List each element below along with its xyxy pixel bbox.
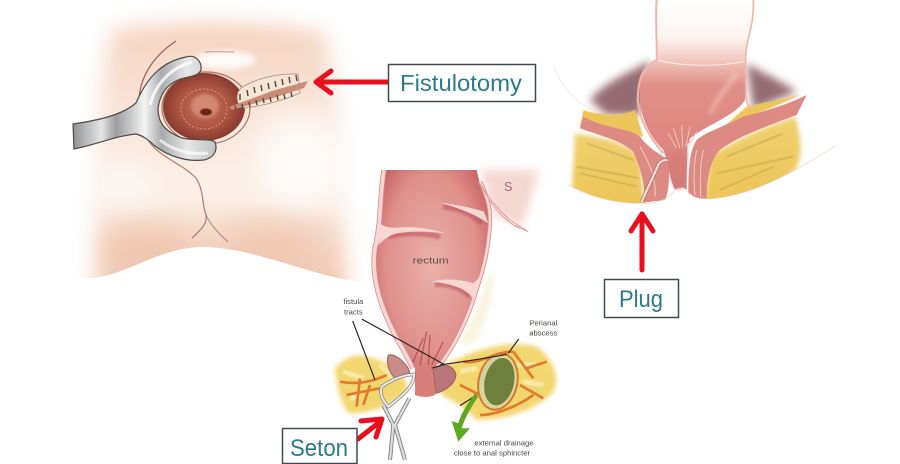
skin background — [95, 22, 346, 300]
label: fistula tracts: fistula — [343, 297, 364, 306]
box: Plug — [604, 280, 678, 318]
box: Fistulotomy: Fistulotomy — [400, 70, 523, 96]
arrow: to fistulotomy site — [316, 71, 388, 93]
label: rectum: rectum — [413, 255, 449, 265]
box: Fistulotomy — [388, 64, 536, 102]
rectal wall and folds — [374, 170, 528, 368]
sigmoid pink region — [480, 170, 538, 227]
seton instrument — [381, 374, 414, 460]
abscess — [473, 350, 523, 413]
plug in fistula — [642, 143, 688, 202]
label lines — [353, 319, 519, 406]
box: Seton: Seton — [290, 435, 348, 462]
anal opening — [162, 72, 250, 144]
panel: fistulotomy illustration — [73, 22, 346, 300]
rectum — [638, 0, 753, 190]
fat tissue — [572, 95, 801, 213]
label: perianal abscess: Perianal — [529, 318, 558, 327]
panel: plug illustration — [553, 0, 837, 213]
skin crease lines — [139, 41, 234, 242]
yellow halo beside rectum — [458, 275, 493, 345]
fold shadows — [388, 207, 482, 297]
sigmoid fold mark: S — [504, 180, 512, 194]
label: external drainage: close to anal sphincter — [454, 448, 531, 457]
green drainage arrow — [452, 393, 478, 442]
retractor — [73, 56, 216, 160]
rectum — [374, 170, 489, 397]
arrow: to plug — [631, 214, 653, 270]
label: perianal abscess: abscess — [529, 328, 558, 337]
sphincter muscle — [580, 95, 807, 203]
probe in fistula tract — [229, 74, 308, 110]
label: external drainage: external drainage — [474, 439, 534, 448]
skin line — [568, 145, 837, 203]
box: Seton — [282, 428, 357, 464]
arrow: to seton — [358, 419, 382, 439]
panel: seton illustration — [335, 170, 558, 460]
shadow behind rectum — [590, 60, 797, 115]
fat tissue — [335, 344, 556, 420]
label: fistula tracts: tracts — [344, 307, 363, 316]
box: Plug: Plug — [619, 286, 663, 313]
internal sphincters — [387, 355, 456, 393]
